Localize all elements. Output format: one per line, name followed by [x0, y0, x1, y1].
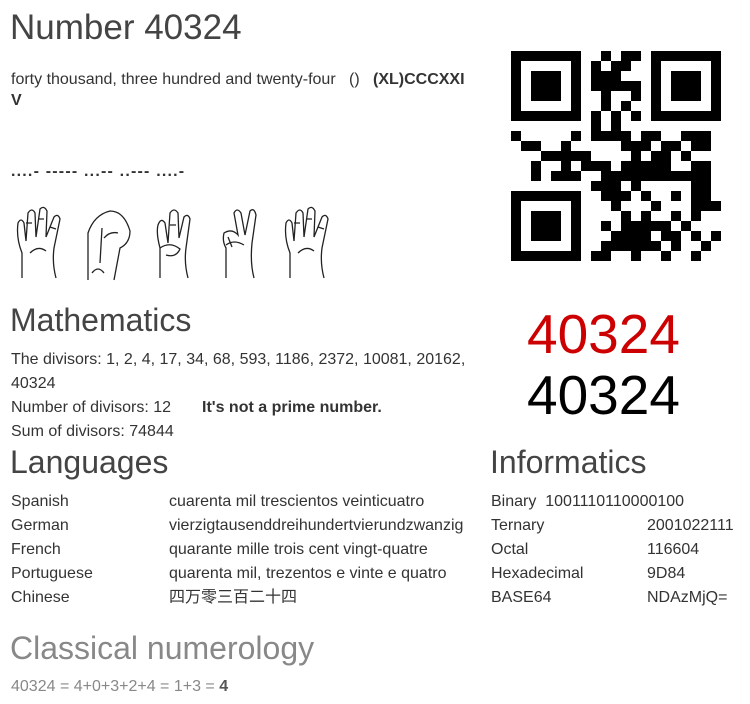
table: informatics [491, 493, 734, 606]
table: informatics: 2001022111 [647, 517, 734, 534]
table: informatics: Octal [491, 541, 528, 558]
heading: Languages: Languages [10, 444, 168, 480]
text: number in words and roman numeral: forty thousand, three hundred and twenty-four () (XL)CCCXXI [11, 71, 465, 88]
icon: sign language hands [16, 206, 329, 280]
table: informatics: NDAzMjQ= [647, 589, 727, 606]
table: languages: vierzigtausenddreihundertvierundzwanzig [169, 517, 463, 534]
table: languages [11, 493, 463, 606]
table: languages: 四万零三百二十四 [169, 589, 297, 606]
heading: Mathematics: Mathematics [10, 302, 191, 338]
table: informatics: BASE64 [491, 589, 551, 606]
table: languages: French [11, 541, 61, 558]
QR code [511, 51, 721, 261]
title: Number 40324 [10, 8, 242, 47]
table: languages: Chinese [11, 589, 70, 606]
table: informatics: 9D84 [647, 565, 685, 582]
text: divisors: Sum of divisors: 74844 [11, 423, 174, 440]
text: numerology: 40324 = 4+0+3+2+4 = 1+3 = 4 [11, 678, 228, 695]
table: informatics: Ternary [491, 517, 544, 534]
table: languages: quarenta mil, trezentos e vinte e quatro [169, 565, 446, 582]
table: informatics: Hexadecimal [491, 565, 583, 582]
table: languages: Portuguese [11, 565, 93, 582]
table: languages: Spanish [11, 493, 69, 510]
heading: Classical numerology: Classical numerology [10, 630, 314, 666]
number: red: 40324 [527, 303, 680, 365]
text: divisors: The divisors: 1, 2, 4, 17, 34, 68, 593, 1186, 2372, 10081, 20162, [11, 351, 465, 368]
text: morse code: ....- ----- ...-- ..--- ....- [11, 163, 185, 180]
text: divisors: Number of divisors: 12 [11, 399, 171, 416]
heading: Informatics: Informatics [490, 444, 646, 480]
table: languages: German [11, 517, 69, 534]
text: divisors: 40324 [11, 375, 56, 392]
table: informatics: Binary 1001110110000100 [491, 493, 684, 510]
table: informatics: 116604 [647, 541, 699, 558]
text: divisors [11, 351, 465, 440]
text: number in words and roman numeral [11, 71, 465, 109]
number: black: 40324 [527, 364, 680, 426]
text: number in words and roman numeral: V [11, 92, 22, 109]
text: divisors: It's not a prime number. [202, 399, 382, 416]
table: languages: cuarenta mil trescientos veinticuatro [169, 493, 424, 510]
table: languages: quarante mille trois cent vingt-quatre [169, 541, 428, 558]
